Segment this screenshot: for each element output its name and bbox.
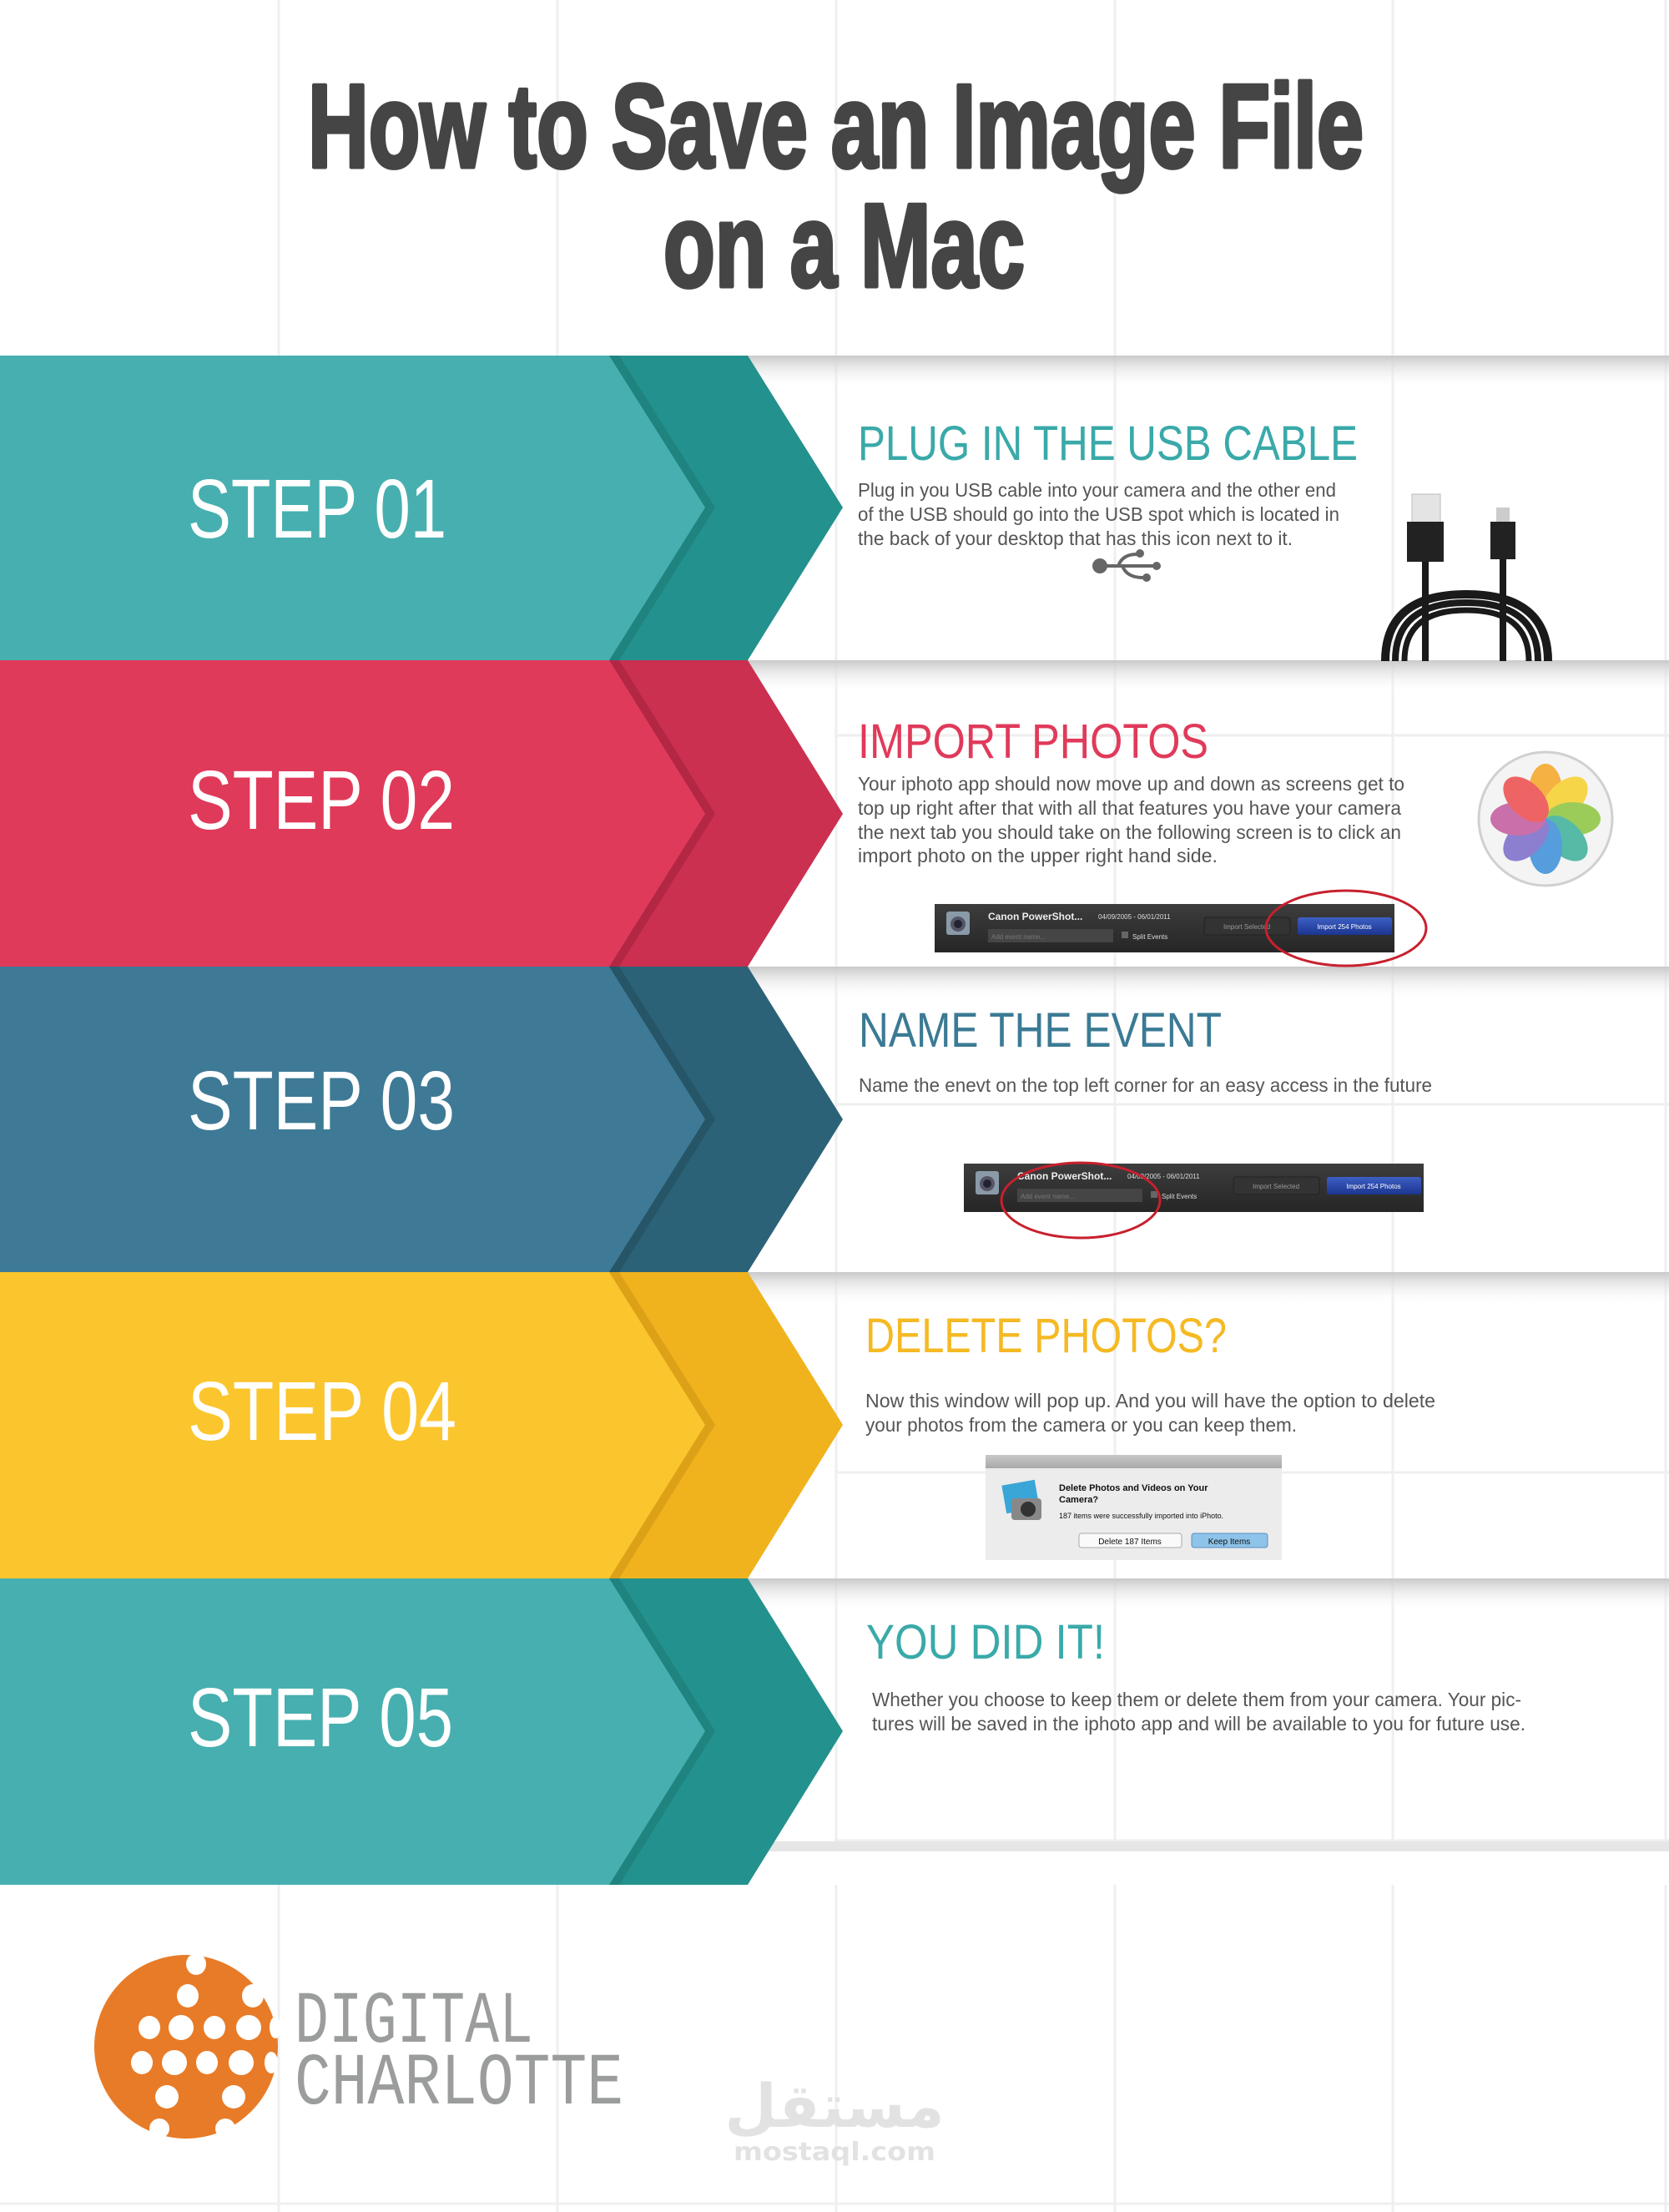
body: import: top up right after that with all that features you have your camera xyxy=(858,797,1401,819)
heading: delete photos: DELETE PHOTOS? xyxy=(865,1309,1227,1363)
panel: step 4 content xyxy=(865,1309,1435,1560)
callout: circle on event name xyxy=(1001,1163,1160,1238)
step 05 arrow: STEP 05 xyxy=(188,1671,453,1765)
text: digital charlotte: CHARLOTTE xyxy=(295,2043,623,2126)
step 02 arrow xyxy=(0,660,843,967)
step 04 arrow: STEP 04 xyxy=(188,1365,456,1458)
panel: step 2 content xyxy=(858,715,1612,966)
body: delete: your photos from the camera or you can keep them. xyxy=(865,1414,1297,1436)
body: import: the next tab you should take on the following screen is to click an xyxy=(858,821,1401,843)
panel: step 1 content xyxy=(858,417,1548,661)
body: plug in: the back of your desktop that has this icon next to it. xyxy=(858,528,1293,549)
icon: photos app xyxy=(1479,752,1612,886)
heading: name the event: NAME THE EVENT xyxy=(859,1003,1222,1058)
body: name: Name the enevt on the top left corner for an easy access in the future xyxy=(859,1074,1432,1096)
screenshot: delete dialog: Camera? xyxy=(1059,1495,1098,1505)
screenshot: event bar xyxy=(964,1164,1424,1212)
title xyxy=(308,60,1364,312)
step 05 arrow xyxy=(0,1578,843,1885)
callout: circle on import button xyxy=(1266,891,1426,966)
title: on a Mac xyxy=(663,179,1025,312)
step 03 arrow xyxy=(0,967,843,1272)
band shadows xyxy=(748,356,1669,1885)
body: done xyxy=(872,1689,1525,1735)
body: import: Your iphoto app should now move up and down as screens get to xyxy=(858,773,1404,795)
body: delete: Now this window will pop up. And you will have the option to delete xyxy=(865,1390,1435,1412)
step 04 arrow xyxy=(0,1272,843,1578)
watermark: mostaql: مستقل xyxy=(724,2071,945,2141)
screenshot: delete dialog: Keep Items xyxy=(1208,1538,1250,1547)
body: done: tures will be saved in the iphoto app and will be available to you for future use. xyxy=(872,1713,1525,1735)
text: digital charlotte xyxy=(295,1982,623,2126)
step 01 arrow xyxy=(0,356,843,660)
body: import xyxy=(858,773,1404,866)
heading: import photos: IMPORT PHOTOS xyxy=(858,715,1208,769)
body: delete xyxy=(865,1390,1435,1436)
body: plug in: of the USB should go into the USB spot which is located in xyxy=(858,503,1339,525)
body: done: Whether you choose to keep them or delete them from your camera. Your pic- xyxy=(872,1689,1521,1710)
heading: plug in: PLUG IN THE USB CABLE xyxy=(858,417,1358,471)
heading: you did it: YOU DID IT! xyxy=(866,1615,1105,1669)
screenshot: import bar xyxy=(935,904,1394,952)
screenshot: delete dialog: 187 items were successfully imported into iPhoto. xyxy=(1059,1512,1223,1520)
screenshot: delete dialog xyxy=(986,1455,1282,1560)
icon: orange dotted circle xyxy=(94,1953,281,2139)
body: import: import photo on the upper right hand side. xyxy=(858,845,1218,866)
text: digital charlotte: DIGITAL xyxy=(295,1982,533,2064)
logo: digital charlotte xyxy=(94,1953,623,2139)
panel: step 5 content xyxy=(866,1615,1525,1735)
icon: usb symbol xyxy=(1092,549,1161,582)
panel: step 3 content xyxy=(859,1003,1432,1238)
icon: usb cable xyxy=(1385,494,1548,661)
step 03 arrow: STEP 03 xyxy=(188,1054,455,1148)
screenshot: delete dialog: Delete Photos and Videos on Your xyxy=(1059,1483,1208,1493)
screenshot: delete dialog: Delete 187 Items xyxy=(1098,1538,1162,1547)
body: plug in: Plug in you USB cable into your camera and the other end xyxy=(858,479,1336,501)
step 01 arrow: STEP 01 xyxy=(188,462,446,556)
watermark: mostaql: mostaql.com xyxy=(734,2138,935,2167)
body: plug in xyxy=(858,479,1339,549)
step 02 arrow: STEP 02 xyxy=(188,754,455,847)
